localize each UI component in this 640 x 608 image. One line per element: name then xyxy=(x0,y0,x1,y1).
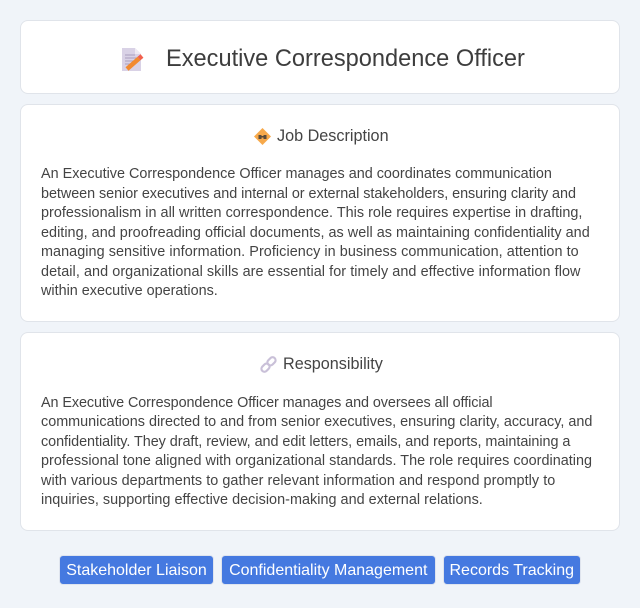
tag: confidentiality management: Confidentiality Management xyxy=(229,562,427,578)
text: job description body: detail, and organizational skills are essential for timely and effective information flow xyxy=(41,264,580,280)
tag: records tracking xyxy=(442,554,581,584)
text: responsibility body: professional tone aligned with organizational standards. The role requires coordinating xyxy=(41,453,592,469)
text: responsibility body xyxy=(41,394,592,508)
icon: orange diamond xyxy=(254,128,271,145)
heading: responsibility: Responsibility xyxy=(283,355,383,373)
tag: stakeholder liaison xyxy=(59,554,214,584)
text: job description body xyxy=(41,166,590,299)
text: responsibility body: inquiries, supporting effective decision-making and external relations. xyxy=(41,492,483,508)
tag: stakeholder liaison: Stakeholder Liaison xyxy=(66,562,207,578)
panel: responsibility xyxy=(20,332,620,531)
text: responsibility body: An Executive Correspondence Officer manages and oversees all official xyxy=(41,394,493,410)
text: job description body: An Executive Correspondence Officer manages and coordinates communication xyxy=(41,166,552,182)
text: job description body: managing sensitive information. Proficiency in business communication, attention to xyxy=(41,244,579,260)
icon: chain link xyxy=(260,356,277,373)
icon: document with pencil xyxy=(122,48,144,71)
text: responsibility body: communications directed to and from senior executives, ensuring clarity, accuracy, and xyxy=(41,414,592,430)
text: responsibility body: confidentiality. They draft, review, and edit letters, emails, and reports, maintaining a xyxy=(41,434,570,450)
text: job description body: within executive operations. xyxy=(41,283,218,299)
heading: job description: Job Description xyxy=(277,127,389,145)
panel: job description xyxy=(20,104,620,322)
panel: title card xyxy=(20,20,620,94)
text: job description body: professionalism in all written correspondence. This role requires expertise in drafting, xyxy=(41,205,582,221)
text: job description body: between senior executives and internal or external stakeholders, ensuring clarity and xyxy=(41,186,576,202)
title: Executive Correspondence Officer xyxy=(166,46,525,72)
text: job description body: editing, and proofreading official documents, as well as maintaining confidentiality and xyxy=(41,224,590,240)
text: responsibility body: with various departments to gather relevant information and respond promptly to xyxy=(41,472,555,488)
tag: records tracking: Records Tracking xyxy=(450,562,574,578)
tag: confidentiality management xyxy=(220,554,436,584)
